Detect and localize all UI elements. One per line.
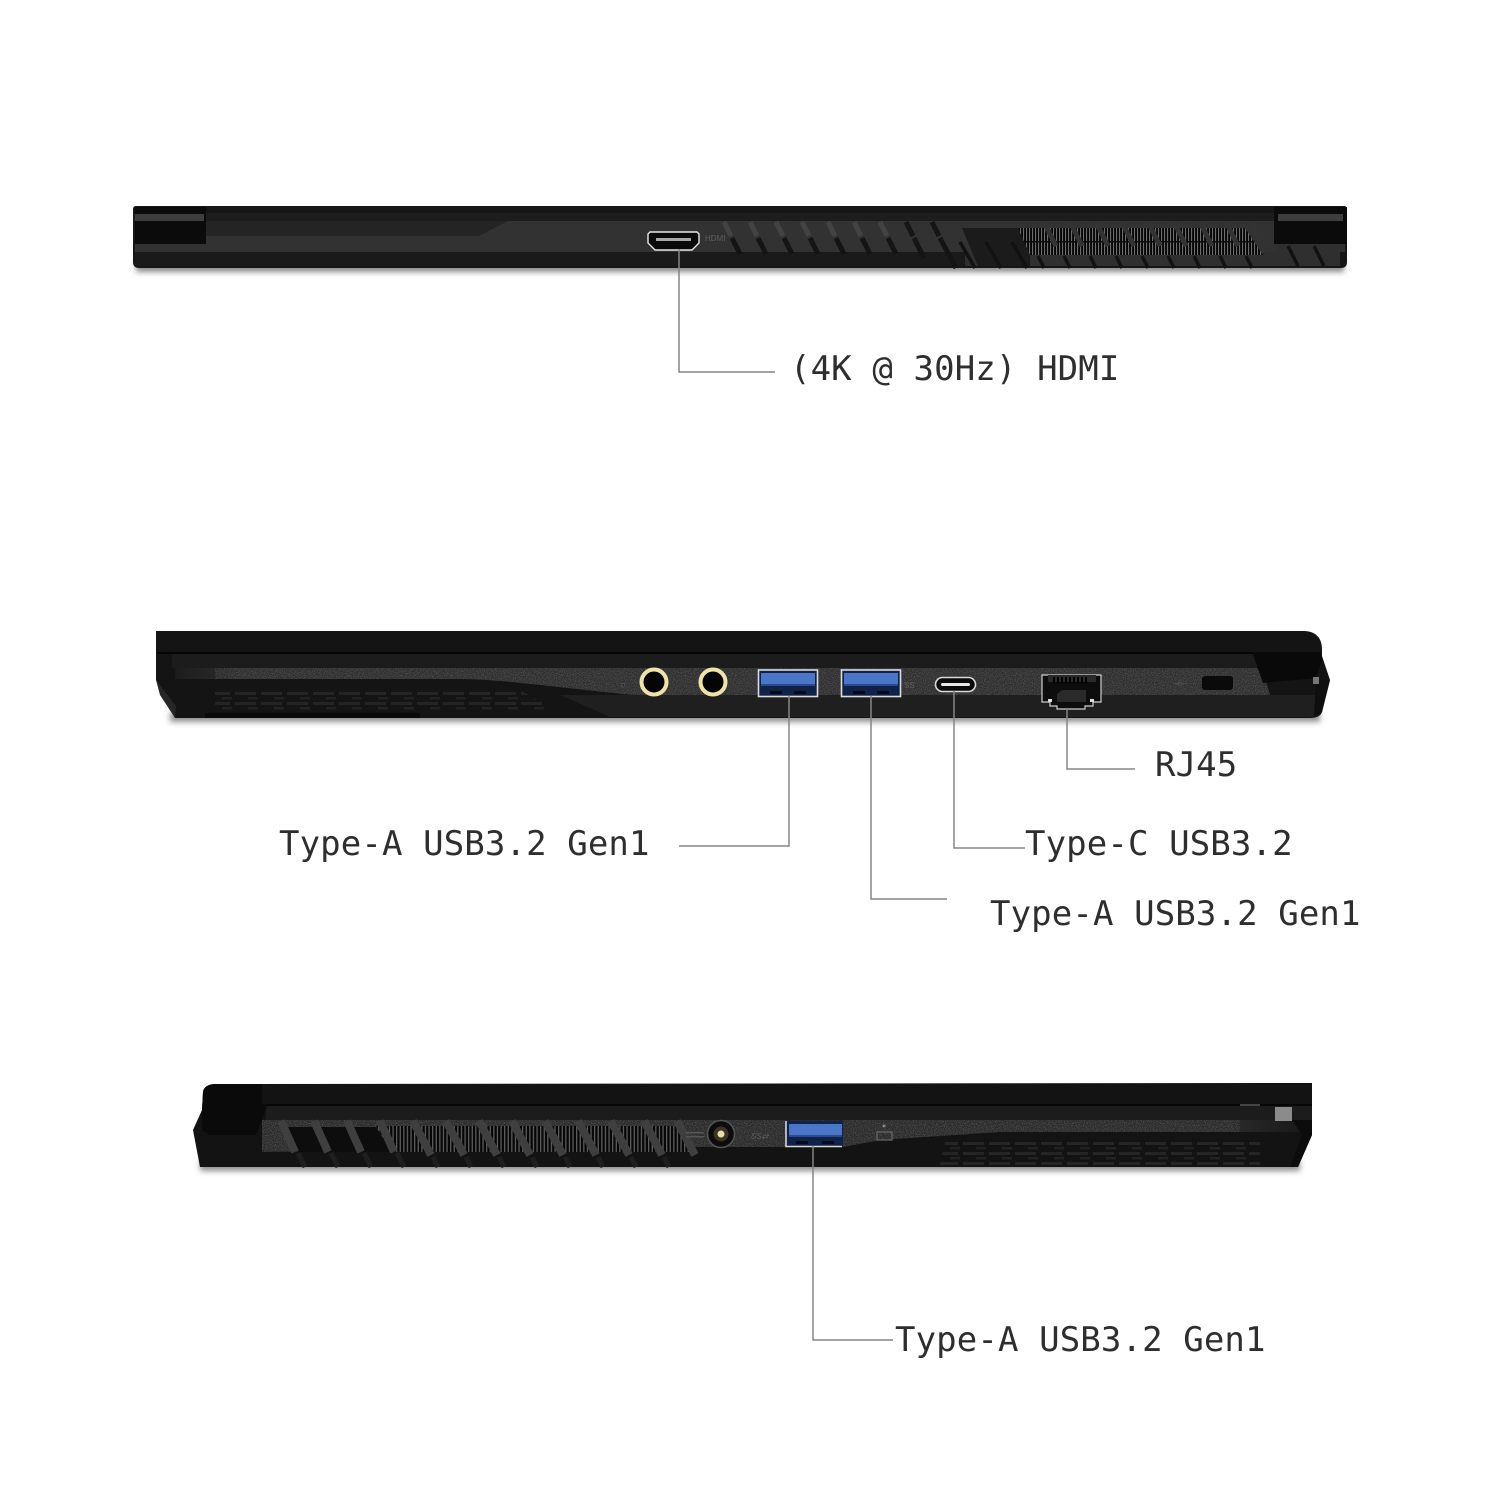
port: USB Type-A two: SS: [904, 681, 915, 690]
port: USB Type-A: [751, 1120, 843, 1146]
port: USB Type-A one: [758, 670, 818, 696]
indicator square: [1275, 1107, 1292, 1121]
right hinge: [1274, 207, 1347, 244]
left hinge: [202, 1084, 268, 1135]
port: security lock: [1173, 676, 1233, 690]
side vent grille: [281, 1121, 695, 1167]
textured band: [262, 1120, 1300, 1152]
diagonal vent slats: [724, 222, 956, 268]
label: HDMI: (4K @ 30Hz) HDMI: [790, 349, 1119, 389]
rear vent grille: [960, 222, 1324, 268]
left hinge: [135, 207, 206, 244]
laptop: right side view: [193, 1083, 1312, 1171]
speaker grille: [940, 1142, 1260, 1165]
leader line: Type-A left: [679, 696, 789, 846]
icon: battery indicator: [877, 1124, 892, 1140]
leader line: Type-A centre: [871, 696, 947, 899]
leader line: RJ45: [1067, 709, 1135, 769]
laptop: left side view: [156, 631, 1330, 722]
port: RJ45: [1042, 675, 1101, 709]
port: headphone jack: [620, 670, 666, 694]
label: Type-A left: Type-A USB3.2 Gen1: [279, 824, 650, 864]
textured upper band: [175, 668, 1270, 695]
laptop: rear view: [133, 206, 1347, 272]
label: Type-C: Type-C USB3.2: [1025, 824, 1293, 864]
label: RJ45: RJ45: [1155, 745, 1237, 785]
leader line: bottom Type-A: [813, 1146, 893, 1340]
port: HDMI: HDMI: [705, 234, 725, 243]
port: HDMI: [648, 232, 725, 250]
port: headphone jack: ∩: [620, 680, 626, 689]
port: microphone jack: [700, 670, 726, 694]
dark square block: [962, 228, 1030, 266]
port: security lock: ⊣⊢: [1173, 679, 1187, 688]
port: USB Type-A two: [842, 670, 915, 696]
leader line: HDMI: [679, 249, 775, 372]
leader line: Type-C: [954, 691, 1025, 848]
label: Type-A centre: Type-A USB3.2 Gen1: [990, 894, 1361, 934]
rear hinge: [1252, 652, 1322, 683]
hex speaker grille: [215, 690, 555, 710]
port: DC power jack: [686, 1120, 734, 1148]
port: USB Type-A: SS⇄: [751, 1132, 770, 1141]
port: USB Type-C: [936, 678, 976, 692]
label: bottom Type-A: Type-A USB3.2 Gen1: [895, 1320, 1266, 1360]
